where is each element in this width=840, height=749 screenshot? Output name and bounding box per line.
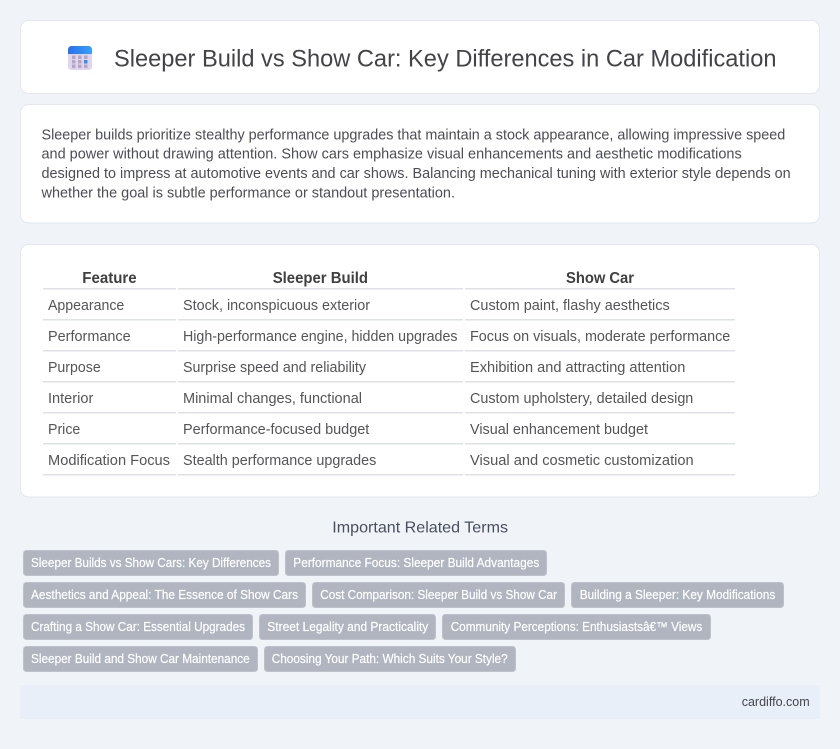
title: Sleeper Build vs Show Car: Key Differences in Car Modification: [114, 46, 776, 73]
table row: purpose: Surprise speed and reliability: [183, 360, 367, 376]
tag: sleeper builds vs show cars: [24, 550, 278, 576]
tag: street legality: Street Legality and Practicality: [267, 620, 429, 634]
table row: performance: High-performance engine, hidden upgrades: [183, 329, 458, 345]
table row: interior: Custom upholstery, detailed design: [470, 391, 693, 407]
table row: performance: [48, 329, 730, 345]
table row: appearance: Custom paint, flashy aesthetics: [470, 298, 670, 314]
table row: price: Performance-focused budget: [183, 422, 369, 438]
panel: summary paragraph: [20, 104, 820, 223]
tag: choosing your path: [264, 646, 516, 672]
tag: cost comparison: Cost Comparison: Sleeper Build vs Show Car: [320, 588, 557, 602]
tag: street legality: [260, 614, 436, 640]
panel: comparison table: [20, 244, 820, 497]
footer text: source: cardiffo.com: [742, 695, 810, 709]
table row: modification focus: Visual and cosmetic customization: [470, 453, 694, 469]
table row: purpose: Purpose: [48, 360, 101, 376]
table row: performance: Performance: [48, 329, 131, 345]
tag: community perceptions: Community Perceptions: Enthusiastsâ€™ Views: [451, 620, 702, 634]
footer bar: [20, 685, 820, 719]
tag: aesthetics and appeal: Aesthetics and Appeal: The Essence of Show Cars: [31, 588, 298, 602]
text block: summary: designed to impress at automotive events and car shows. Balancing mechanical tuning with exterior style depends on: [42, 166, 791, 182]
tag: maintenance: Sleeper Build and Show Car Maintenance: [31, 652, 250, 666]
heading: important related terms: Important Related Terms: [332, 520, 508, 537]
table row: interior: [48, 391, 693, 407]
tag: performance focus: Performance Focus: Sleeper Build Advantages: [293, 556, 539, 570]
table header row: Show Car: [566, 270, 634, 287]
table row: modification focus: Stealth performance upgrades: [183, 453, 376, 469]
table row: performance: Focus on visuals, moderate performance: [470, 329, 730, 345]
tag: community perceptions: [442, 614, 710, 640]
tag: cost comparison: [312, 582, 564, 608]
text block: summary: whether the goal is subtle performance or standout presentation.: [40, 185, 455, 201]
icon: calendar: [68, 46, 92, 70]
table row: price: [48, 422, 648, 438]
tag: maintenance: [24, 646, 258, 672]
panel: title header: [20, 20, 820, 94]
table row: modification focus: Modification Focus: [48, 453, 170, 469]
tag: crafting a show car: Crafting a Show Car: Essential Upgrades: [31, 620, 245, 634]
table header row: [82, 270, 634, 287]
related term tags: [24, 550, 784, 672]
tag: sleeper builds vs show cars: Sleeper Builds vs Show Cars: Key Differences: [31, 556, 271, 570]
tag: choosing your path: Choosing Your Path: Which Suits Your Style?: [272, 652, 508, 666]
text block: summary: and power without drawing attention. Show cars emphasize visual enhancements and aesthetic modifications: [42, 146, 742, 162]
tag: aesthetics and appeal: [24, 582, 306, 608]
table row: appearance: Appearance: [48, 298, 124, 314]
table row: interior: Interior: [48, 391, 94, 407]
table row: appearance: Stock, inconspicuous exterior: [183, 298, 370, 314]
text block: summary: [40, 127, 791, 201]
table row: purpose: [48, 360, 685, 376]
table row: price: Visual enhancement budget: [470, 422, 648, 438]
tag: building a sleeper: [572, 582, 784, 608]
table header row: Sleeper Build: [273, 270, 368, 287]
table header row: Feature: [82, 270, 137, 287]
tag: building a sleeper: Building a Sleeper: Key Modifications: [580, 588, 775, 602]
tag: performance focus: [286, 550, 546, 576]
tag: crafting a show car: [24, 614, 252, 640]
table row: appearance: [48, 298, 670, 314]
table row: price: Price: [48, 422, 80, 438]
table row: modification focus: [48, 453, 694, 469]
text block: summary: Sleeper builds prioritize stealthy performance upgrades that maintain a stock appearance, allowing impressive speed: [42, 127, 785, 143]
table row: interior: Minimal changes, functional: [183, 391, 362, 407]
table row: purpose: Exhibition and attracting attention: [470, 360, 685, 376]
